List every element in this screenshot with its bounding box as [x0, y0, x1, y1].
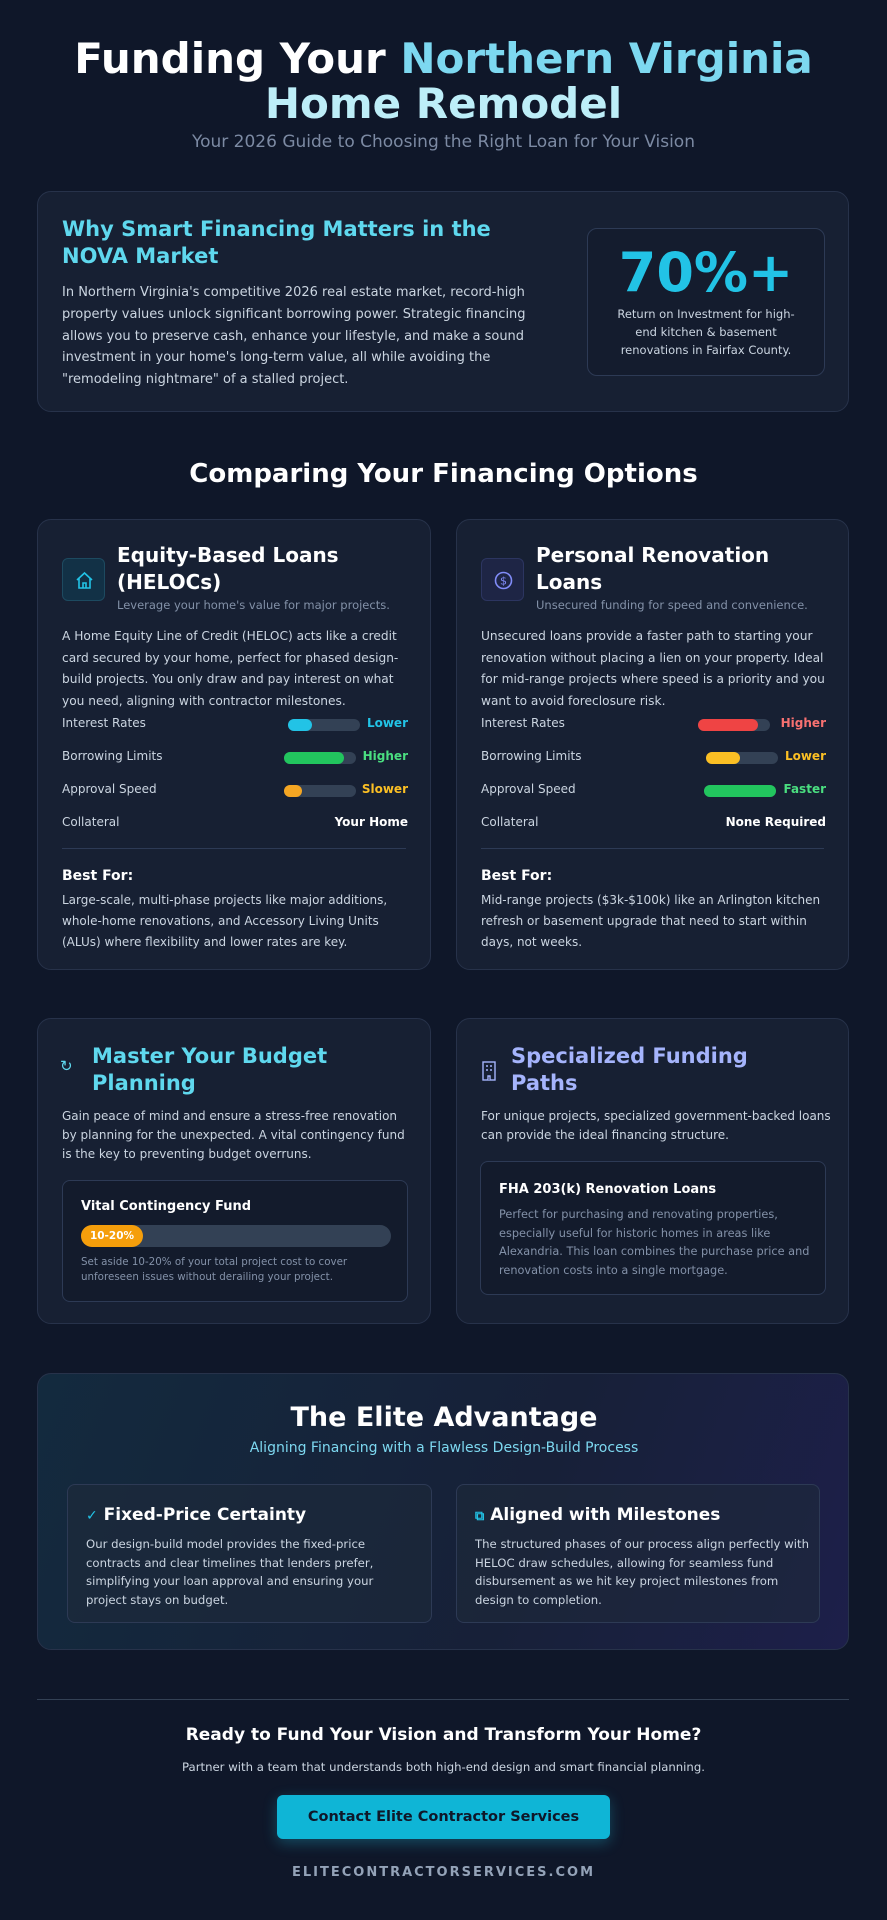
stat callout: Return on Investment for high-end kitchen & basement renovations in Fairfax County. [617, 307, 795, 357]
box: milestones: The structured phases of our process align perfectly with HELOC draw schedules, allowing for seamless fund disbursement as we hit key project milestones from design to completion. [475, 1537, 809, 1606]
panel: elite advantage [37, 1373, 849, 1650]
contingency box [62, 1180, 408, 1302]
metrics: Collateral [481, 815, 538, 829]
metrics: Faster [783, 782, 826, 796]
metrics [62, 716, 408, 829]
heading: Personal Renovation Loans [536, 543, 769, 594]
box: fixed price [67, 1484, 432, 1623]
text block: For unique projects, specialized government-backed loans can provide the ideal financing structure. [481, 1109, 831, 1142]
panel: personal loans: Unsecured funding for speed and convenience. [536, 598, 808, 612]
heading [511, 1044, 748, 1095]
box: milestones: ⧉ Aligned with Milestones [475, 1505, 720, 1525]
contingency box: Vital Contingency Fund [81, 1199, 251, 1214]
contingency box: Set aside 10-20% of your total project cost to cover unforeseen issues without derailing your project. [81, 1256, 347, 1283]
heading: Paths [511, 1071, 578, 1095]
heading: Planning [92, 1071, 196, 1095]
heading: comparing: Comparing Your Financing Options [189, 459, 698, 489]
metrics: Higher [363, 749, 408, 763]
metrics: Slower [362, 782, 408, 796]
panel: specialized funding [456, 1018, 849, 1324]
title: Home Remodel [265, 79, 622, 128]
panel: HELOC: Leverage your home's value for major projects. [117, 598, 390, 612]
metrics: Borrowing Limits [62, 749, 162, 763]
subtitle: Your 2026 Guide to Choosing the Right Loan for Your Vision [192, 132, 695, 152]
metrics: Higher [781, 716, 826, 730]
panel: why smart financing [37, 191, 849, 412]
panel: budget planning [37, 1018, 431, 1324]
text block: Unsecured loans provide a faster path to starting your renovation without placing a lien on your property. Ideal for mid-range projects where speed is a priority and you want to avoid foreclosure risk. [481, 629, 825, 708]
heading [92, 1044, 327, 1095]
icon: building [482, 1061, 496, 1081]
metrics: Interest Rates [62, 716, 146, 730]
progress bar [81, 1225, 391, 1247]
FHA box: Perfect for purchasing and renovating properties, especially useful for historic homes in areas like Alexandria. This loan combines the purchase price and renovation costs into a single mortgage. [499, 1208, 809, 1276]
panel: HELOC [37, 519, 431, 970]
best for: Best For: [62, 868, 133, 884]
metrics: Approval Speed [481, 782, 576, 796]
text block: Gain peace of mind and ensure a stress-free renovation by planning for the unexpected. A vital contingency fund is the key to preventing budget overruns. [62, 1109, 405, 1161]
CTA text: Partner with a team that understands both high-end design and smart financial planning. [182, 1760, 705, 1774]
panel: personal loans [456, 519, 849, 970]
box: fixed price: Our design-build model provides the fixed-price contracts and clear timelines that lenders prefer, simplifying your loan approval and ensuring your project stays on budget. [86, 1537, 373, 1606]
metrics: Collateral [62, 815, 119, 829]
metrics: None Required [726, 815, 826, 829]
heading: The Elite Advantage [291, 1402, 597, 1433]
metrics: Interest Rates [481, 716, 565, 730]
metrics: Borrowing Limits [481, 749, 582, 763]
box: milestones [456, 1484, 820, 1623]
icon: dollar: $ [500, 574, 507, 588]
metrics [481, 716, 826, 829]
button [277, 1795, 610, 1839]
title [74, 34, 813, 128]
heading: Why Smart Financing Matters in the NOVA Market [62, 217, 491, 268]
metrics: Your Home [335, 815, 408, 829]
button: Contact Elite Contractor Services [308, 1809, 579, 1825]
stat callout [587, 228, 825, 376]
icon: dollar [481, 558, 524, 601]
text block: A Home Equity Line of Credit (HELOC) acts like a credit card secured by your home, perfect for phased design-build projects. You only draw and pay interest on what you need, aligning with contractor milestones. [62, 629, 398, 708]
best for [62, 868, 387, 949]
title: Funding Your Northern Virginia [74, 34, 813, 83]
best for: Best For: [481, 868, 552, 884]
icon: house [62, 558, 105, 601]
metrics: Lower [785, 749, 826, 763]
stat callout: 70%+ [619, 241, 793, 304]
heading: Master Your Budget [92, 1044, 327, 1068]
text block: In Northern Virginia's competitive 2026 real estate market, record-high property values unlock significant borrowing power. Strategic financing allows you to preserve cash, enhance your lifestyle, and make a sound investment in your home's long-term value, all while avoiding the "remodeling nightmare" of a stalled project. [62, 285, 526, 387]
footer: ELITECONTRACTORSERVICES.COM [292, 1865, 595, 1880]
best for: Mid-range projects ($3k-$100k) like an Arlington kitchen refresh or basement upgrade that need to start within days, not weeks. [481, 893, 820, 949]
panel: elite advantage: Aligning Financing with a Flawless Design-Build Process [250, 1440, 638, 1456]
FHA box [480, 1161, 826, 1295]
metrics: Lower [367, 716, 408, 730]
FHA box: FHA 203(k) Renovation Loans [499, 1182, 716, 1197]
best for [481, 868, 820, 949]
heading: Specialized Funding [511, 1044, 748, 1068]
progress bar: 10-20% [90, 1230, 134, 1242]
CTA heading: Ready to Fund Your Vision and Transform Your Home? [186, 1725, 701, 1745]
metrics: Approval Speed [62, 782, 157, 796]
heading: Equity-Based Loans (HELOCs) [117, 543, 339, 594]
box: fixed price: ✓ Fixed-Price Certainty [86, 1505, 306, 1525]
best for: Large-scale, multi-phase projects like major additions, whole-home renovations, and Accessory Living Units (ALUs) where flexibility and lower rates are key. [62, 893, 387, 949]
icon: refresh: ↻ [60, 1057, 73, 1075]
